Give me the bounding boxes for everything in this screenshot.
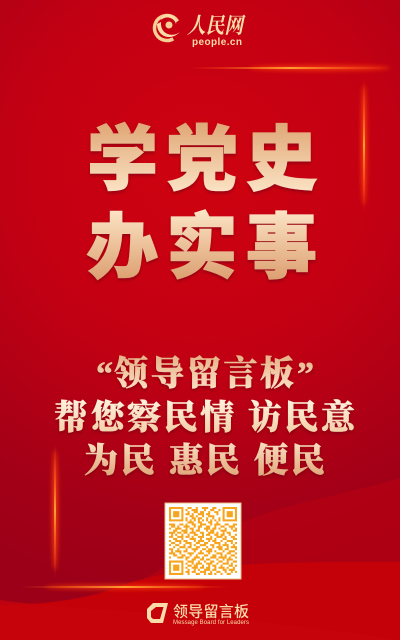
icon: board bracket	[147, 603, 168, 623]
title: 办实事: 实	[166, 209, 238, 288]
title: 办实事: 办	[87, 209, 158, 288]
subtitle: 帮您察民情 访民意: 帮您察民情 访民意	[54, 398, 358, 437]
subtitle: 领导留言板: 领导留言板	[114, 355, 294, 393]
glow: bottom horizontal line	[20, 584, 230, 590]
glow: left vertical line	[52, 443, 58, 578]
title: 学党史	[87, 121, 317, 200]
glow: top right horizontal line	[190, 65, 390, 71]
subtitle: 领导留言板: ”	[297, 356, 314, 393]
QR code	[165, 503, 241, 579]
title: 办实事: 事	[246, 209, 317, 288]
bottom logo wordmark: 领导留言板	[173, 604, 249, 620]
icon: people's daily swirl	[150, 11, 184, 45]
title: 学党史: 史	[246, 121, 317, 200]
logo url: people.cn	[192, 37, 242, 48]
title: 办实事	[87, 209, 317, 288]
logo: Message Board for Leaders	[147, 603, 249, 626]
subtitle: 领导留言板: “	[96, 356, 113, 393]
glow: right vertical line	[361, 78, 367, 213]
subtitle: 为民 惠民 便民: 为民 惠民 便民	[84, 442, 325, 480]
logo: people.cn	[150, 11, 246, 48]
title: 学党史: 学	[87, 121, 158, 200]
bottom logo tagline: Message Board for Leaders	[173, 620, 249, 626]
title: 学党史: 党	[166, 121, 238, 200]
logo wordmark: 人民网	[187, 13, 246, 38]
